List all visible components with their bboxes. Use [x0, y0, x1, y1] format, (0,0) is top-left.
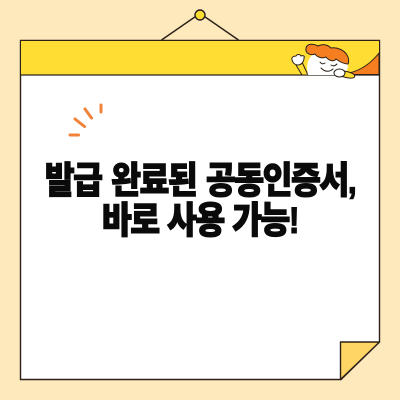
character sleeve — [341, 71, 355, 78]
icon: folded page corner — [340, 342, 380, 380]
title — [45, 160, 355, 241]
icon: orange corner swoosh — [349, 53, 379, 74]
character resting hand — [334, 69, 345, 77]
header divider line — [20, 74, 380, 76]
panel: yellow header band — [21, 41, 379, 75]
character face — [307, 52, 348, 75]
character hair — [306, 44, 349, 64]
title line 2: 바로 사용 가능! — [102, 200, 298, 241]
character eyes and smile — [320, 62, 337, 71]
character hand — [292, 54, 304, 65]
icon: hanger wire and pin — [162, 10, 238, 40]
icon: orange sparkle marks — [70, 105, 101, 135]
character arm — [296, 62, 308, 75]
title line 1: 발급 완료된 공동인증서, — [45, 160, 355, 201]
icon: waving character — [292, 44, 355, 78]
panel: paper sheet — [20, 40, 380, 380]
